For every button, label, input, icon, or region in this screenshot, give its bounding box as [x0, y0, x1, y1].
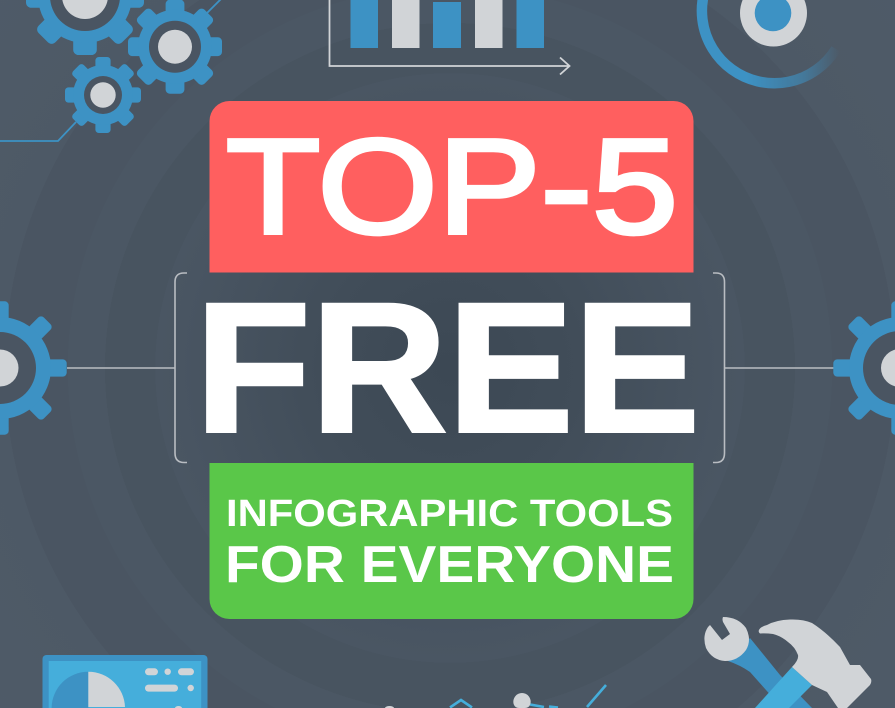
wrench handle — [728, 638, 812, 708]
subtitle line two: FOR EVERYONE — [225, 536, 674, 594]
icon: medium gear top — [128, 0, 222, 94]
subtitle line one: INFOGRAPHIC TOOLS — [226, 493, 673, 535]
icon: left gear — [0, 301, 67, 435]
hammer head — [759, 619, 871, 708]
left bracket and connector — [67, 273, 187, 462]
panel: green subtitle banner — [210, 463, 694, 619]
icon: crossed wrench and hammer — [704, 617, 871, 708]
heading: TOP-5: TOP-5 — [226, 111, 678, 262]
heading: FREE: FREE — [195, 266, 700, 472]
icon: small gear top — [65, 57, 141, 133]
icon: large gear top left — [26, 0, 144, 55]
icon: dashboard card with pie chart — [42, 655, 208, 708]
icon: target dial top right — [702, 0, 836, 83]
hammer handle — [755, 667, 812, 708]
icon: line chart at bottom — [385, 685, 606, 708]
connector lines: circuit traces from gears — [0, 0, 222, 141]
panel: red title banner — [210, 101, 694, 272]
icon: right gear — [833, 301, 895, 435]
right bracket and connector — [713, 273, 834, 462]
bar chart icon — [330, 0, 570, 74]
wrench head — [704, 617, 749, 661]
